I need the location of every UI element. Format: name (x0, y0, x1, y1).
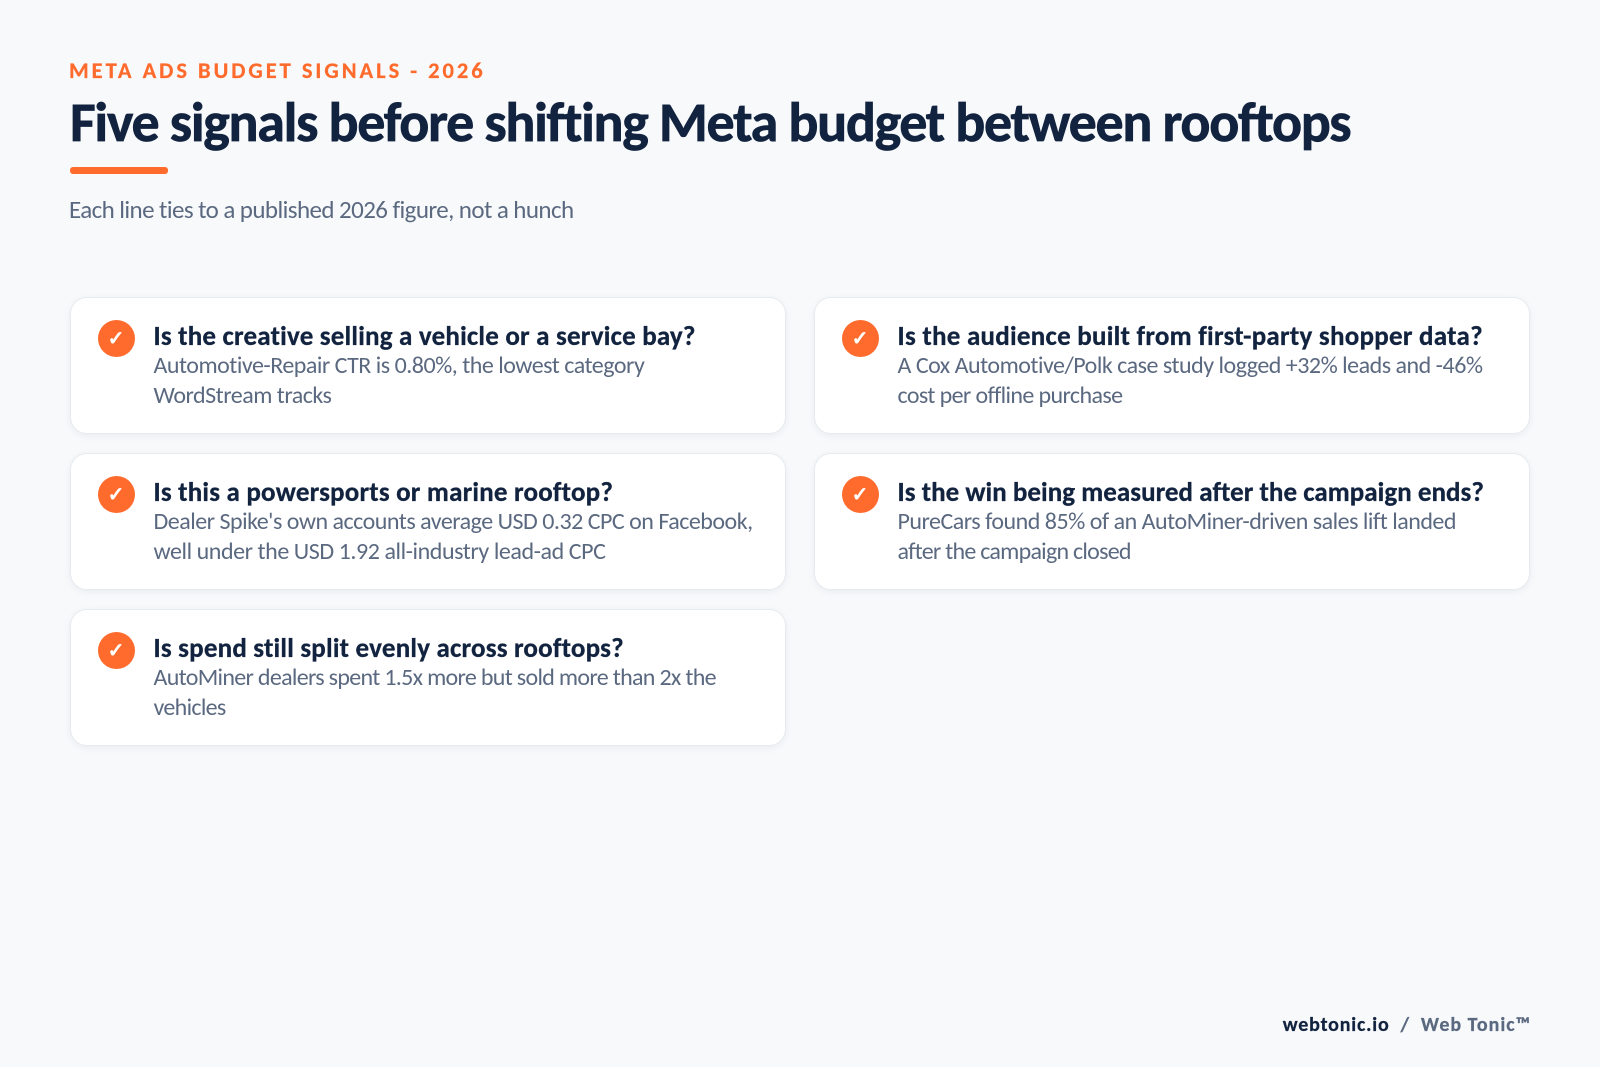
icon: check: ✓ (852, 482, 868, 506)
text: creative (154, 351, 645, 410)
eyebrow: META ADS BUDGET SIGNALS - 2026 (69, 58, 486, 85)
icon: check (842, 476, 878, 513)
heading: measurement: Is the win being measured after the campaign ends? (898, 476, 1484, 509)
accent rule (70, 167, 168, 174)
text: audience: A Cox Automotive/Polk case study logged +32% leads and -46% (898, 351, 1483, 380)
text: powersports (154, 507, 753, 566)
footer brand: webtonic.io / Web Tonic™ (1283, 1013, 1531, 1037)
text: creative: Automotive-Repair CTR is 0.80%, the lowest category (154, 351, 644, 380)
text: creative: WordStream tracks (154, 381, 331, 410)
panel: powersports signal (70, 453, 786, 590)
text: spend: AutoMiner dealers spent 1.5x more but sold more than 2x the (154, 663, 716, 692)
icon: check: ✓ (852, 326, 868, 350)
heading: creative: Is the creative selling a vehicle or a service bay? (154, 320, 696, 353)
text: measurement: after the campaign closed (898, 537, 1131, 566)
icon: check: ✓ (108, 638, 124, 662)
heading: spend: Is spend still split evenly across rooftops? (154, 632, 624, 665)
text: powersports: well under the USD 1.92 all-industry lead-ad CPC (154, 537, 605, 566)
heading: audience: Is the audience built from first-party shopper data? (898, 320, 1483, 353)
panel: creative signal (70, 297, 786, 434)
panel: audience signal (814, 297, 1530, 434)
icon: check (98, 320, 134, 357)
heading: powersports: Is this a powersports or marine rooftop? (154, 476, 613, 509)
text: audience (898, 351, 1483, 410)
icon: check (98, 476, 134, 513)
panel: spend signal (70, 609, 786, 746)
icon: check (842, 320, 878, 357)
subtitle: Each line ties to a published 2026 figure, not a hunch (69, 194, 574, 224)
text: powersports: Dealer Spike's own accounts average USD 0.32 CPC on Facebook, (154, 507, 753, 536)
icon: check (98, 632, 134, 669)
title: Five signals before shifting Meta budget between rooftops (70, 89, 1350, 157)
text: measurement: PureCars found 85% of an AutoMiner-driven sales lift landed (898, 507, 1456, 536)
text: audience: cost per offline purchase (898, 381, 1122, 410)
icon: check: ✓ (108, 326, 124, 350)
text: spend: vehicles (154, 693, 226, 722)
text: spend (154, 663, 716, 722)
icon: check: ✓ (108, 482, 124, 506)
panel: measurement signal (814, 453, 1530, 590)
text: measurement (898, 507, 1456, 566)
